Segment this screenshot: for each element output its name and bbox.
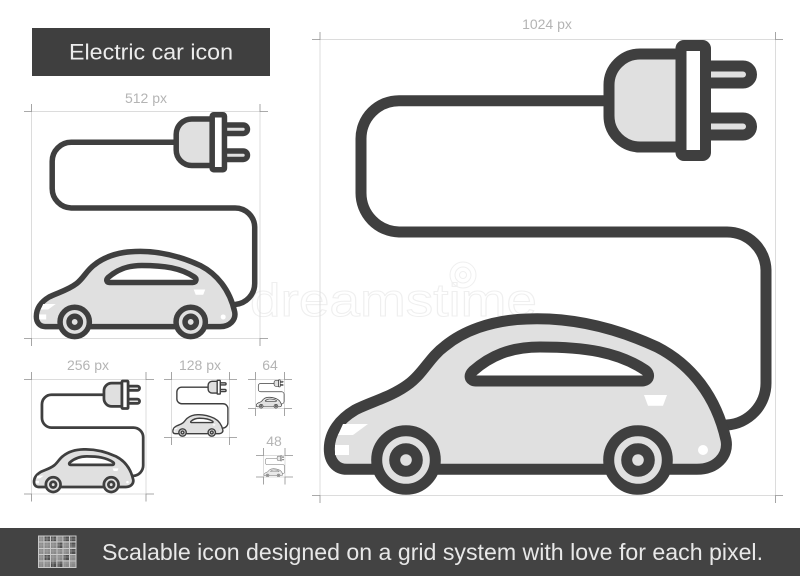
icon 256 px with size label	[24, 357, 154, 502]
footer text: Scalable icon designed on a grid system with love for each pixel.	[102, 539, 763, 565]
icon 512 px with size label	[24, 90, 268, 346]
icon 256 px with size label: 256 px	[67, 357, 109, 373]
icon: pixel grid	[38, 536, 76, 568]
icon 48 px with size label: 48	[266, 433, 282, 449]
icon 128 px with size label: 128 px	[179, 357, 221, 373]
icon 1024 px with size label: 1024 px	[522, 16, 572, 32]
title banner	[32, 28, 270, 76]
watermark: dreamstime	[250, 274, 537, 326]
icon 64 px with size label: 64	[262, 357, 278, 373]
icon 512 px with size label: 512 px	[125, 90, 167, 106]
footer bar	[0, 528, 800, 576]
icon 128 px with size label	[164, 357, 237, 445]
icon 48 px with size label	[256, 433, 293, 484]
icon 64 px with size label	[248, 357, 292, 416]
watermark	[250, 262, 537, 326]
title banner: Electric car icon	[69, 40, 233, 64]
